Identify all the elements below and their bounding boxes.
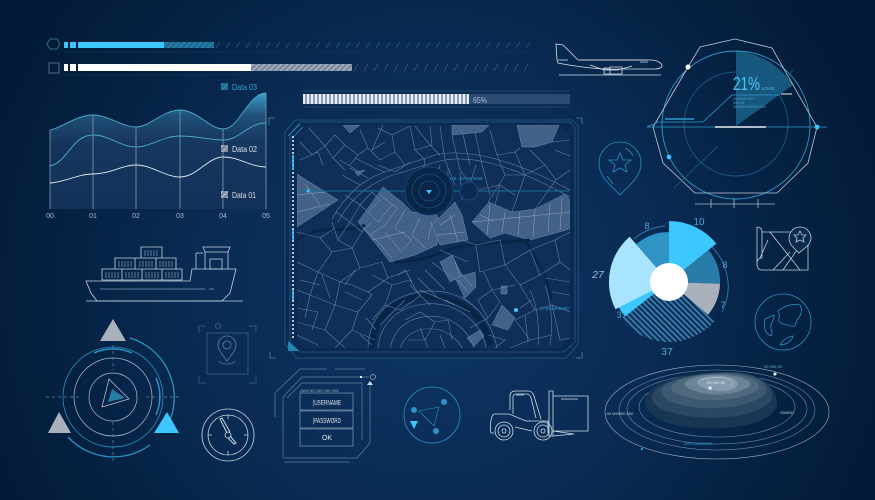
icon: forklift — [490, 391, 588, 440]
pie labels: 10 — [693, 217, 705, 228]
terrain labels: 000000 — [780, 410, 794, 415]
form small caption: 00000 000 0000 0000 0000 — [300, 389, 339, 393]
map marker bottom right: 1750 5089400 — [540, 306, 569, 311]
chart axis labels — [46, 213, 270, 220]
gauge small caption: 0000000 000 — [733, 97, 753, 101]
chart axis labels: 01 — [89, 213, 97, 220]
chart legend: Data 03 — [221, 82, 257, 92]
contour terrain chart — [605, 364, 829, 459]
pie chart — [591, 217, 728, 358]
map ticker strip — [292, 136, 294, 340]
icon: clock — [202, 409, 254, 461]
chart legend: Data 02: Data 02 — [232, 144, 257, 154]
chart axis labels: 04 — [219, 213, 227, 220]
chart axis labels: 00 — [46, 213, 54, 220]
icon: airplane — [556, 44, 662, 75]
chart axis labels: 05 — [262, 213, 270, 220]
terrain labels: 00 000 00 — [764, 364, 783, 369]
pie labels: 8 — [644, 221, 650, 231]
map corner marker — [288, 341, 299, 351]
progress bar 65% — [303, 91, 570, 107]
pie labels: 7 — [720, 300, 726, 310]
map crosshair line — [297, 190, 570, 192]
pie labels — [591, 217, 728, 358]
map radar target — [405, 167, 483, 215]
chart legend: Data 01: Data 01 — [232, 190, 256, 200]
icon: cargo ship — [86, 247, 243, 301]
icon: grey triangle left — [48, 412, 71, 433]
pie labels: 8 — [722, 260, 728, 270]
pie labels: 27 — [591, 269, 605, 281]
chart legend: Data 02 — [221, 144, 257, 154]
chart axis labels: 02 — [132, 213, 140, 220]
pie labels: 3 — [616, 310, 622, 320]
terrain labels — [607, 364, 794, 446]
gauge unit: LOAD — [762, 86, 775, 91]
map marker left — [306, 189, 310, 193]
map frame — [269, 118, 582, 358]
input: password: |PASSWORD — [313, 416, 341, 425]
gauge small caption — [733, 97, 766, 109]
terrain labels: 0000000000000 — [684, 441, 713, 446]
input: username: |USERNAME — [313, 398, 341, 407]
terrain labels: 00 000 00 — [707, 380, 726, 385]
map radar target: Lat. 16740 3458 — [450, 176, 483, 181]
icon: inner triangle — [102, 379, 129, 407]
icon: grey triangle top — [100, 319, 126, 341]
radar compass — [46, 319, 180, 462]
terrain labels: 00 000000 000 — [607, 411, 634, 416]
icon: folded map with pin — [757, 227, 811, 270]
area chart — [46, 82, 270, 220]
login form — [275, 369, 376, 462]
progress label: 65% — [473, 95, 487, 105]
panel: city map — [269, 118, 582, 358]
chart legend: Data 01 — [221, 190, 256, 200]
gauge value: 21% — [733, 74, 760, 94]
button: ok: OK — [322, 435, 332, 442]
icon: star pin — [599, 142, 641, 195]
map streets — [297, 125, 570, 350]
chart legend: Data 03: Data 03 — [232, 82, 257, 92]
icon: globe — [755, 294, 811, 350]
gauge small caption: 000 00 — [733, 101, 744, 105]
icon: location pin frame — [199, 324, 256, 383]
icon: cyan triangle right — [154, 412, 179, 433]
map marker bottom right — [514, 306, 569, 312]
icon: network circle — [404, 387, 460, 443]
gauge small caption: 000000 0000000 000 — [733, 105, 766, 109]
progress bars top-left — [47, 39, 535, 75]
gauge: 21% load — [647, 39, 827, 208]
chart axis labels: 03 — [176, 213, 184, 220]
pie labels: 37 — [661, 346, 673, 358]
